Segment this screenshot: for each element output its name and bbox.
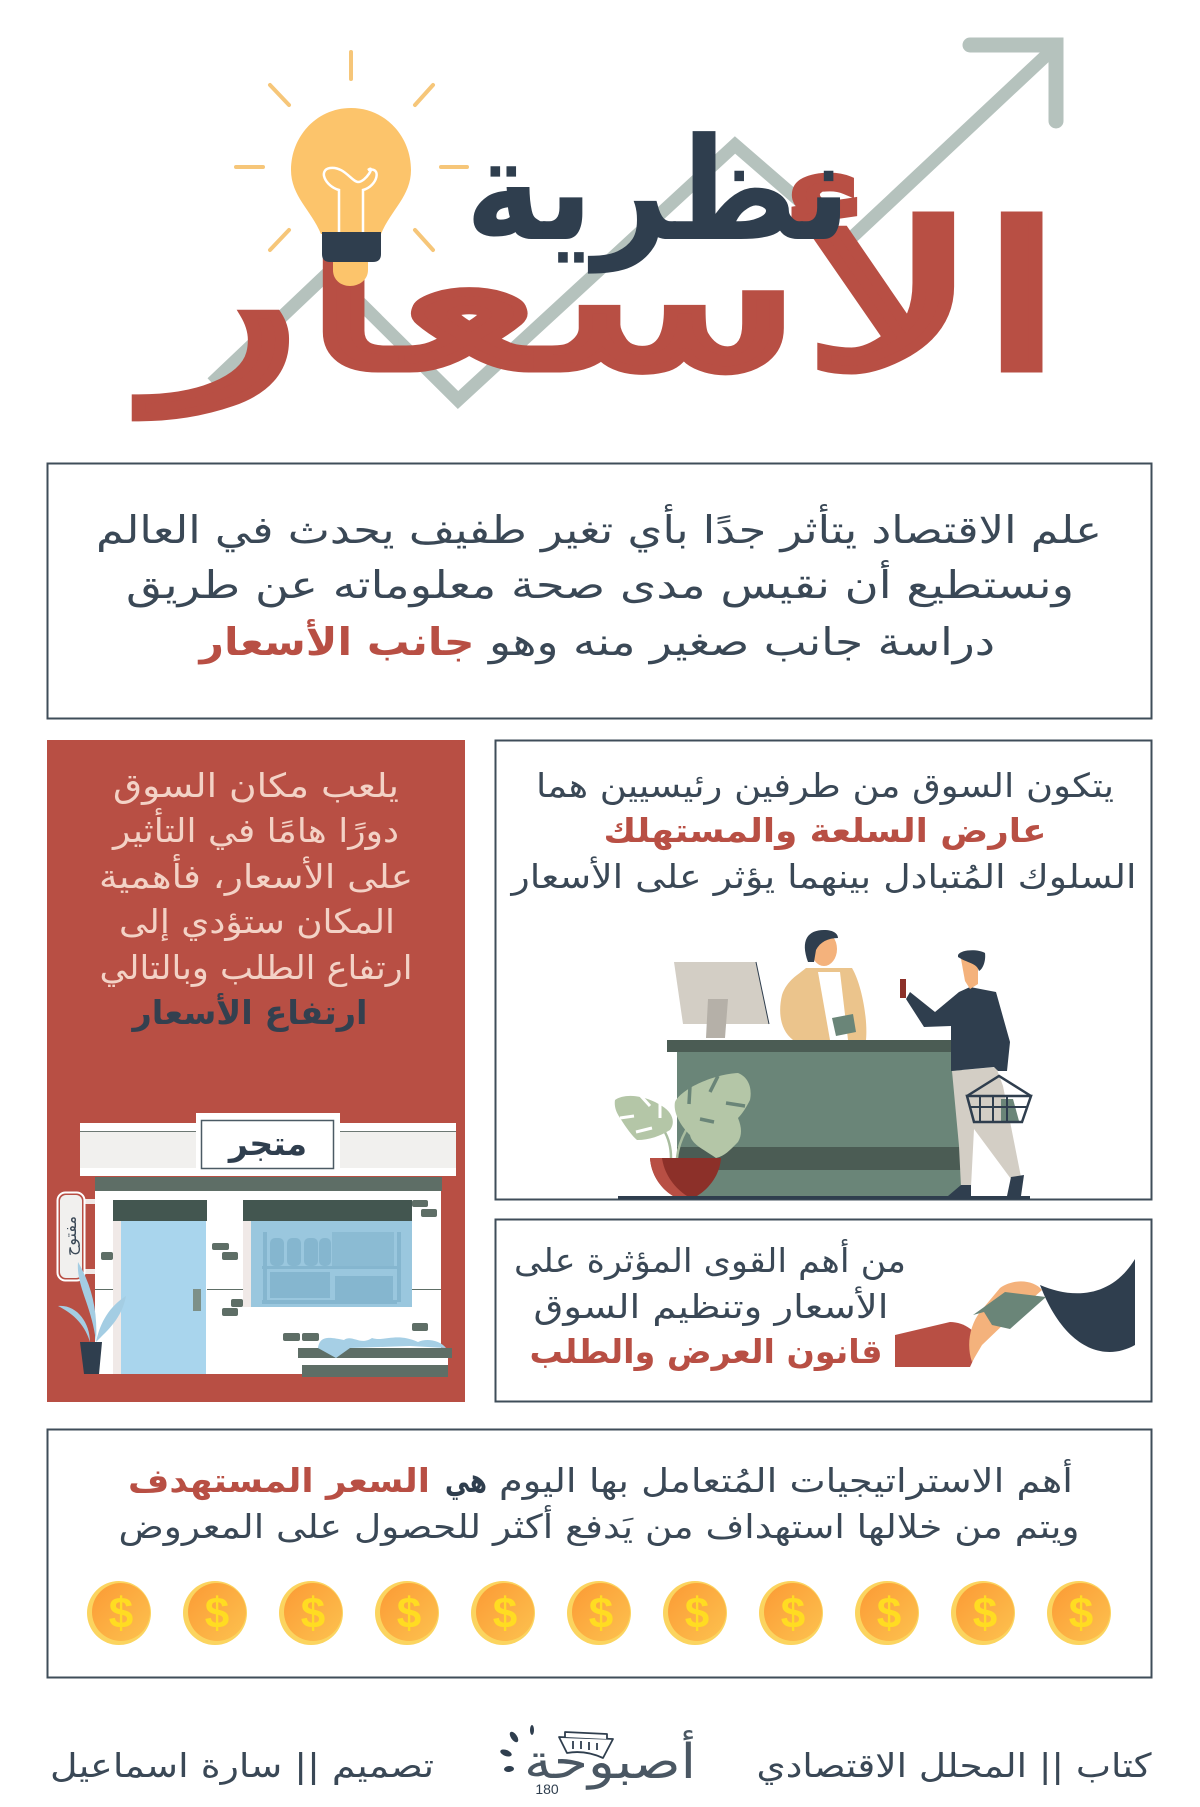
coin row: $ <box>589 1589 613 1638</box>
illustration: shop counter scene <box>615 930 1031 1200</box>
market place text <box>99 766 413 1032</box>
logo: Osboha 180: أصبوحة <box>524 1730 696 1790</box>
cashier <box>780 930 866 1040</box>
market place text: المكان ستؤدي إلى <box>119 902 395 942</box>
strategy text <box>118 1459 1080 1547</box>
icon: open book on logo <box>559 1732 613 1758</box>
footer credit: book: كتاب || المحلل الاقتصادي <box>756 1746 1152 1785</box>
intro text <box>96 504 1102 665</box>
coin row: $ <box>109 1589 133 1638</box>
strategy text: السعر المستهدف <box>128 1461 430 1501</box>
floor line <box>618 1196 1030 1200</box>
coin row: $ <box>685 1589 709 1638</box>
market parties text: يتكون السوق من طرفين رئيسيين هما <box>536 766 1114 805</box>
store plant <box>58 1262 126 1374</box>
panel: target price strategy <box>48 1430 1152 1678</box>
icon: rising arrow <box>212 45 1056 400</box>
intro text: ونستطيع أن نقيس مدى صحة معلوماته عن طريق <box>126 560 1074 608</box>
coin row: $ <box>877 1589 901 1638</box>
market place text: ارتفاع الأسعار <box>130 992 368 1032</box>
potted plant <box>615 1073 751 1196</box>
coin row: $ <box>973 1589 997 1638</box>
icon: store front <box>58 1113 456 1377</box>
supply and demand text <box>514 1239 906 1372</box>
icon: light bulb <box>236 52 467 286</box>
footer credit: design: تصميم || سارة اسماعيل <box>50 1746 434 1785</box>
icon: sun rays on logo <box>499 1725 534 1772</box>
logo number: 180 <box>535 1781 559 1797</box>
store sign <box>196 1113 340 1175</box>
market parties text: السلوك المُتبادل بينهما يؤثر على الأسعار <box>509 856 1137 896</box>
supply and demand text: الأسعار وتنظيم السوق <box>534 1286 888 1326</box>
strategy text: هي <box>445 1461 487 1500</box>
monitor <box>674 962 769 1038</box>
logo: Osboha 180 <box>499 1725 696 1797</box>
planter <box>298 1337 452 1377</box>
coin row: $ <box>301 1589 325 1638</box>
shopping basket <box>967 1076 1031 1122</box>
intro text: دراسة جانب صغير منه وهو <box>487 620 995 665</box>
coin row: $ <box>205 1589 229 1638</box>
store sign: متجر <box>227 1124 307 1164</box>
panel: introduction <box>48 464 1152 718</box>
strategy text: أهم الاستراتيجيات المُتعامل بها اليوم <box>499 1459 1073 1500</box>
market parties text: عارض السلعة والمستهلك <box>604 811 1046 851</box>
supply and demand text: قانون العرض والطلب <box>530 1332 882 1372</box>
coin row: $ <box>781 1589 805 1638</box>
panel: market place (red) <box>47 740 465 1402</box>
strategy text: ويتم من خلالها استهداف من يَدفع أكثر للحصول على المعروض <box>118 1505 1080 1547</box>
counter <box>667 1040 963 1197</box>
icon: hand exchanging money <box>895 1259 1135 1367</box>
panel: supply and demand <box>496 1220 1152 1402</box>
market place text: دورًا هامًا في التأثير <box>111 808 399 850</box>
market place text: ارتفاع الطلب وبالتالي <box>100 948 412 987</box>
customer <box>900 950 1031 1196</box>
coin row <box>87 1581 1111 1645</box>
open sign <box>58 1192 95 1280</box>
coin row: $ <box>397 1589 421 1638</box>
market parties text <box>509 766 1137 896</box>
open sign: مفتوح <box>61 1216 81 1256</box>
market place text: على الأسعار، فأهمية <box>99 854 413 896</box>
title word: theory: نظرية <box>465 108 851 274</box>
intro text: علم الاقتصاد يتأثر جدًا بأي تغير طفيف يحدث في العالم <box>96 504 1102 553</box>
panel: market parties <box>496 740 1152 1200</box>
market place text: يلعب مكان السوق <box>113 766 399 805</box>
title word: prices: الأسعار <box>138 177 1065 417</box>
coin row: $ <box>493 1589 517 1638</box>
coin row: $ <box>1069 1589 1093 1638</box>
intro text: جانب الأسعار <box>197 618 475 664</box>
title block <box>138 45 1065 417</box>
supply and demand text: من أهم القوى المؤثرة على <box>514 1239 906 1280</box>
